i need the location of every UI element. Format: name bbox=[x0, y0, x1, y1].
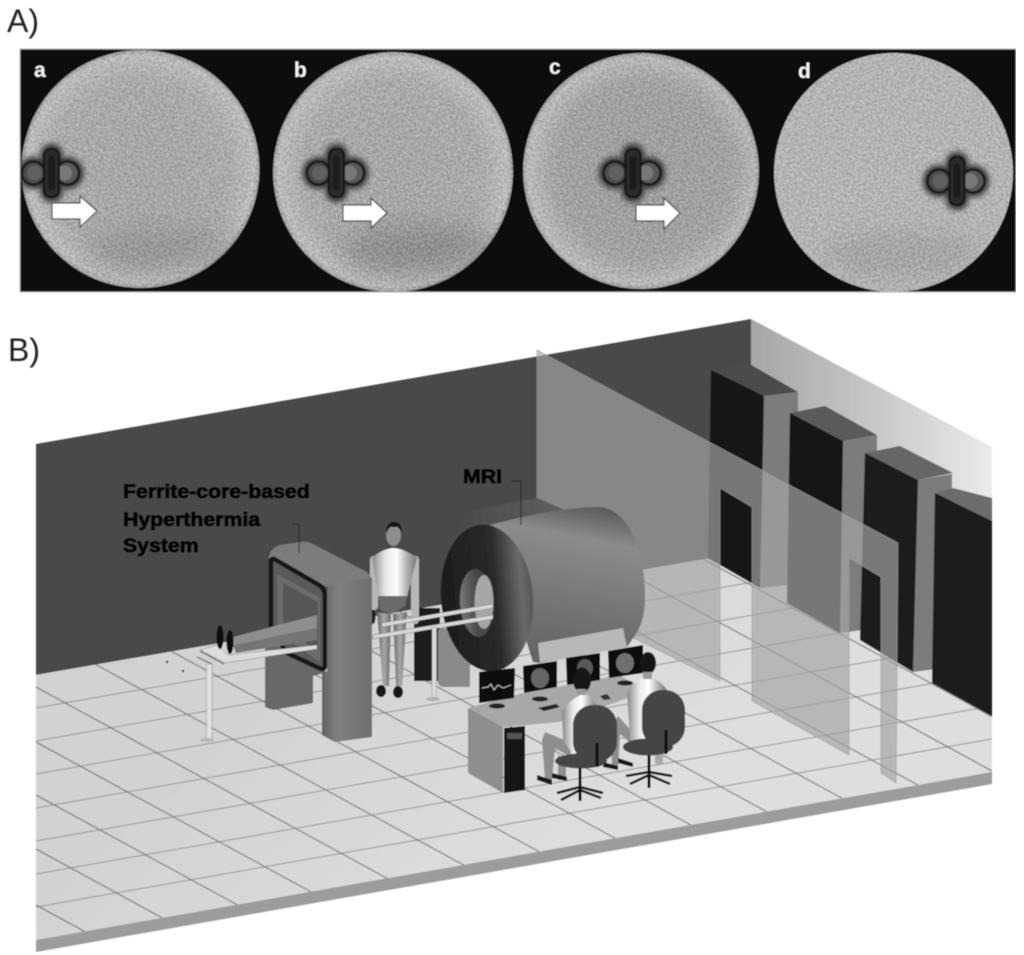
glass partition with door openings bbox=[537, 350, 898, 783]
image label b: b bbox=[294, 59, 307, 82]
floor front edge bbox=[36, 772, 992, 952]
head bbox=[386, 522, 402, 546]
phantom image d bbox=[770, 49, 1016, 292]
label: ferrite-core-based hyperthermia system: System bbox=[123, 536, 199, 557]
monitor 2 brain scan bbox=[523, 661, 557, 702]
window inner panel bbox=[277, 574, 320, 662]
torso bbox=[372, 548, 417, 597]
MRI main cylinder bbox=[490, 507, 645, 663]
image label a: a bbox=[34, 59, 46, 82]
leader line: MRI bbox=[511, 481, 521, 525]
desk side bbox=[468, 708, 503, 793]
heading: panel B: B) bbox=[8, 332, 40, 368]
scanner table rails bbox=[373, 604, 493, 701]
chair bbox=[623, 690, 685, 788]
arrow: motion direction c bbox=[636, 198, 680, 229]
computer tower bbox=[504, 726, 525, 793]
operator 1 and chair bbox=[537, 668, 617, 801]
equipment cabinet 2 bbox=[787, 406, 877, 633]
feet bbox=[376, 685, 403, 698]
arrow: motion direction a bbox=[52, 196, 97, 227]
patient table and patient bbox=[166, 615, 317, 742]
chair bbox=[555, 705, 617, 801]
table top bbox=[200, 645, 317, 663]
arms bbox=[370, 556, 419, 624]
torso bbox=[627, 675, 667, 745]
head bbox=[573, 668, 591, 695]
operator 2 and chair bbox=[603, 652, 685, 788]
phantom image b bbox=[270, 49, 515, 292]
mouse pad bbox=[600, 694, 611, 700]
arrow: motion direction b bbox=[343, 198, 387, 228]
patient feet bbox=[216, 625, 234, 654]
MRI front ring bbox=[435, 521, 539, 675]
trunks bbox=[378, 596, 407, 614]
panel B: 3D treatment room bbox=[35, 318, 993, 952]
phantom image c bbox=[520, 49, 765, 292]
heading: panel A: A) bbox=[7, 3, 39, 39]
legs bbox=[537, 732, 572, 785]
MRI bore bbox=[458, 568, 496, 638]
MRI rear housing bbox=[460, 498, 565, 530]
label: ferrite-core-based hyperthermia system: Hyperthermia bbox=[123, 510, 261, 531]
equipment cabinet 3 bbox=[860, 446, 953, 672]
gantry rear leg bbox=[265, 640, 327, 710]
label: ferrite-core-based hyperthermia system: Ferrite-core-based bbox=[123, 482, 310, 503]
operator console bbox=[468, 645, 645, 793]
monitor 1 waveform bbox=[479, 668, 515, 708]
floor with tiles bbox=[36, 141, 992, 950]
MRI scanner bbox=[414, 498, 645, 687]
legs bbox=[603, 716, 663, 770]
back wall bbox=[36, 319, 751, 675]
equipment cabinet 4 bbox=[932, 488, 992, 716]
MRI rear console bbox=[414, 608, 470, 687]
phantom image a bbox=[18, 49, 265, 292]
table pole bbox=[200, 664, 214, 742]
image label c: c bbox=[549, 56, 561, 79]
right wall bbox=[751, 319, 992, 700]
gantry window frame bbox=[271, 559, 325, 669]
label: MRI: MRI bbox=[463, 467, 502, 488]
standing man bbox=[370, 522, 419, 698]
panel A: MRI image strip bbox=[18, 49, 1016, 292]
legs bbox=[377, 612, 407, 686]
patient legs bbox=[233, 615, 317, 653]
MRI pedestal bbox=[538, 628, 627, 663]
monitor 4 brain scan bbox=[608, 645, 643, 686]
equipment cabinet 1 bbox=[708, 363, 798, 588]
head bbox=[640, 652, 656, 679]
desk top bbox=[468, 675, 645, 727]
image label d: d bbox=[798, 60, 811, 83]
leader line: hyperthermia system bbox=[292, 524, 299, 553]
gantry top bbox=[269, 542, 372, 590]
label: ferrite-core-based hyperthermia system bbox=[123, 482, 310, 557]
floor markers bbox=[166, 661, 184, 672]
keyboard bbox=[538, 704, 560, 711]
gantry front leg bbox=[322, 578, 372, 742]
monitor 3 brain scan bbox=[566, 653, 600, 685]
table marks bbox=[197, 651, 224, 664]
torso bbox=[562, 693, 598, 757]
ferrite-core hyperthermia gantry bbox=[265, 542, 372, 742]
